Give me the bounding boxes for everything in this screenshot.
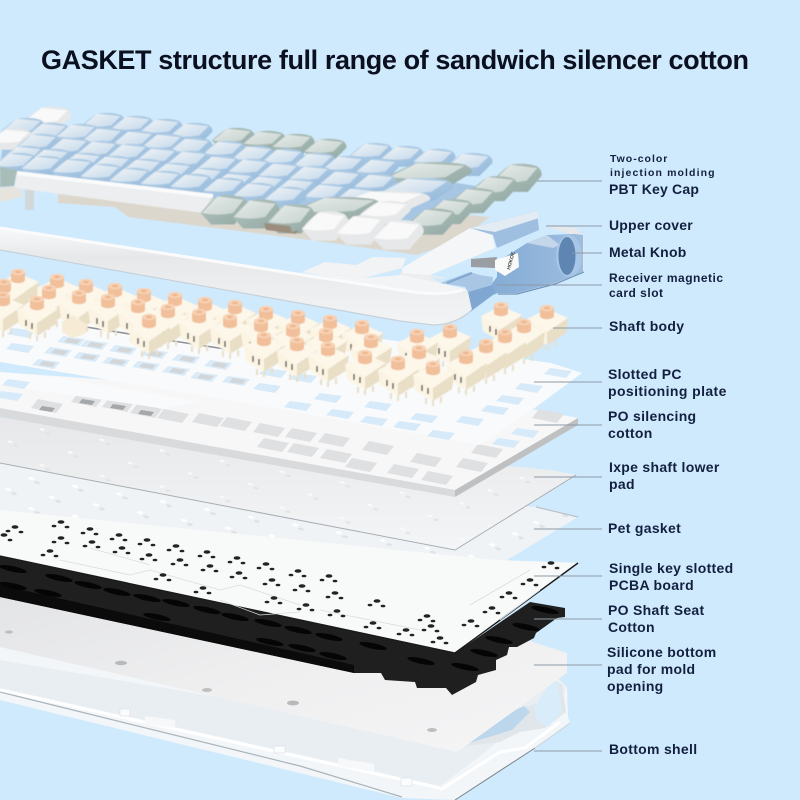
receiver tray: [440, 272, 493, 292]
label: slotted PC plate: [608, 366, 727, 399]
label: ixpe pad: Ixpe shaft lower: [609, 459, 720, 475]
label: PO shaft seat cotton: [608, 602, 705, 635]
receiver dongle: HOKOE: [506, 251, 517, 271]
label: ixpe pad: [609, 459, 720, 492]
label: metal knob: Metal Knob: [609, 244, 686, 260]
space bar: [15, 172, 213, 213]
label: PCBA board: PCBA board: [609, 577, 694, 593]
silencing cotton holes: [31, 386, 564, 485]
layer: shaft body switches: [0, 269, 568, 406]
layer: pet gasket: [0, 463, 578, 568]
label: PBT key cap: [609, 153, 716, 197]
layer: single key slotted PCBA board: [0, 510, 578, 653]
metal clip: [264, 223, 298, 234]
layer: PO shaft seat cotton: [0, 556, 565, 695]
layer: ixpe shaft lower pad: [0, 418, 576, 550]
label: receiver slot: card slot: [609, 286, 664, 300]
label: PO silencing cotton: [608, 408, 696, 441]
label: bottom shell: Bottom shell: [609, 741, 697, 757]
PCB solder points: [0, 520, 559, 644]
label: receiver slot: [609, 271, 724, 300]
metal knob: [556, 235, 582, 277]
label: silicone bottom pad: [607, 644, 716, 694]
leader lines: [497, 181, 602, 751]
layer: silicone bottom pad: [0, 592, 567, 752]
label: PBT key cap: Two-color: [610, 153, 668, 165]
label: upper cover: Upper cover: [609, 217, 693, 233]
layer: bottom shell: [0, 640, 570, 800]
label: PBT key cap: injection molding: [610, 167, 716, 179]
cover front bar: [0, 228, 472, 325]
label: pet gasket: Pet gasket: [608, 520, 681, 536]
label: PO shaft seat cotton: Cotton: [608, 619, 655, 635]
label: silicone bottom pad: pad for mold: [607, 661, 695, 677]
label: ixpe pad: pad: [609, 476, 635, 492]
label: slotted PC plate: Slotted PC: [608, 366, 682, 382]
layer: PO silencing cotton: [0, 372, 578, 497]
label: PO shaft seat cotton: PO Shaft Seat: [608, 602, 705, 618]
label: receiver slot: Receiver magnetic: [609, 271, 724, 285]
keycap rows: [0, 107, 542, 235]
layer: upper cover: [0, 211, 584, 325]
receiver dongle: [471, 251, 519, 276]
label: silicone bottom pad: opening: [607, 678, 664, 694]
plate windows: [0, 328, 572, 440]
label: silicone bottom pad: Silicone bottom: [607, 644, 716, 660]
upper blue side cap: [470, 211, 539, 248]
title: GASKET structure full range of sandwich silencer cotton: [41, 45, 749, 75]
keyboard base plate: [58, 185, 490, 255]
label: PO silencing cotton: PO silencing: [608, 408, 696, 424]
label: PBT key cap: PBT Key Cap: [609, 181, 699, 197]
layer: slotted PC positioning plate: [0, 285, 582, 445]
blue knob housing: [470, 234, 583, 312]
keycap backing: [0, 130, 500, 225]
layer: PBT key caps: [0, 107, 542, 255]
bottom row keys: [201, 195, 424, 250]
label: PO silencing cotton: cotton: [608, 425, 653, 441]
cover rear arms: [302, 257, 406, 278]
label: PCBA board: [609, 560, 733, 593]
label: slotted PC plate: positioning plate: [608, 383, 727, 399]
black cotton holes: [0, 563, 559, 673]
label: shaft body: Shaft body: [609, 318, 684, 334]
knob housing rear rim: [546, 226, 584, 284]
label: PCBA board: Single key slotted: [609, 560, 733, 576]
